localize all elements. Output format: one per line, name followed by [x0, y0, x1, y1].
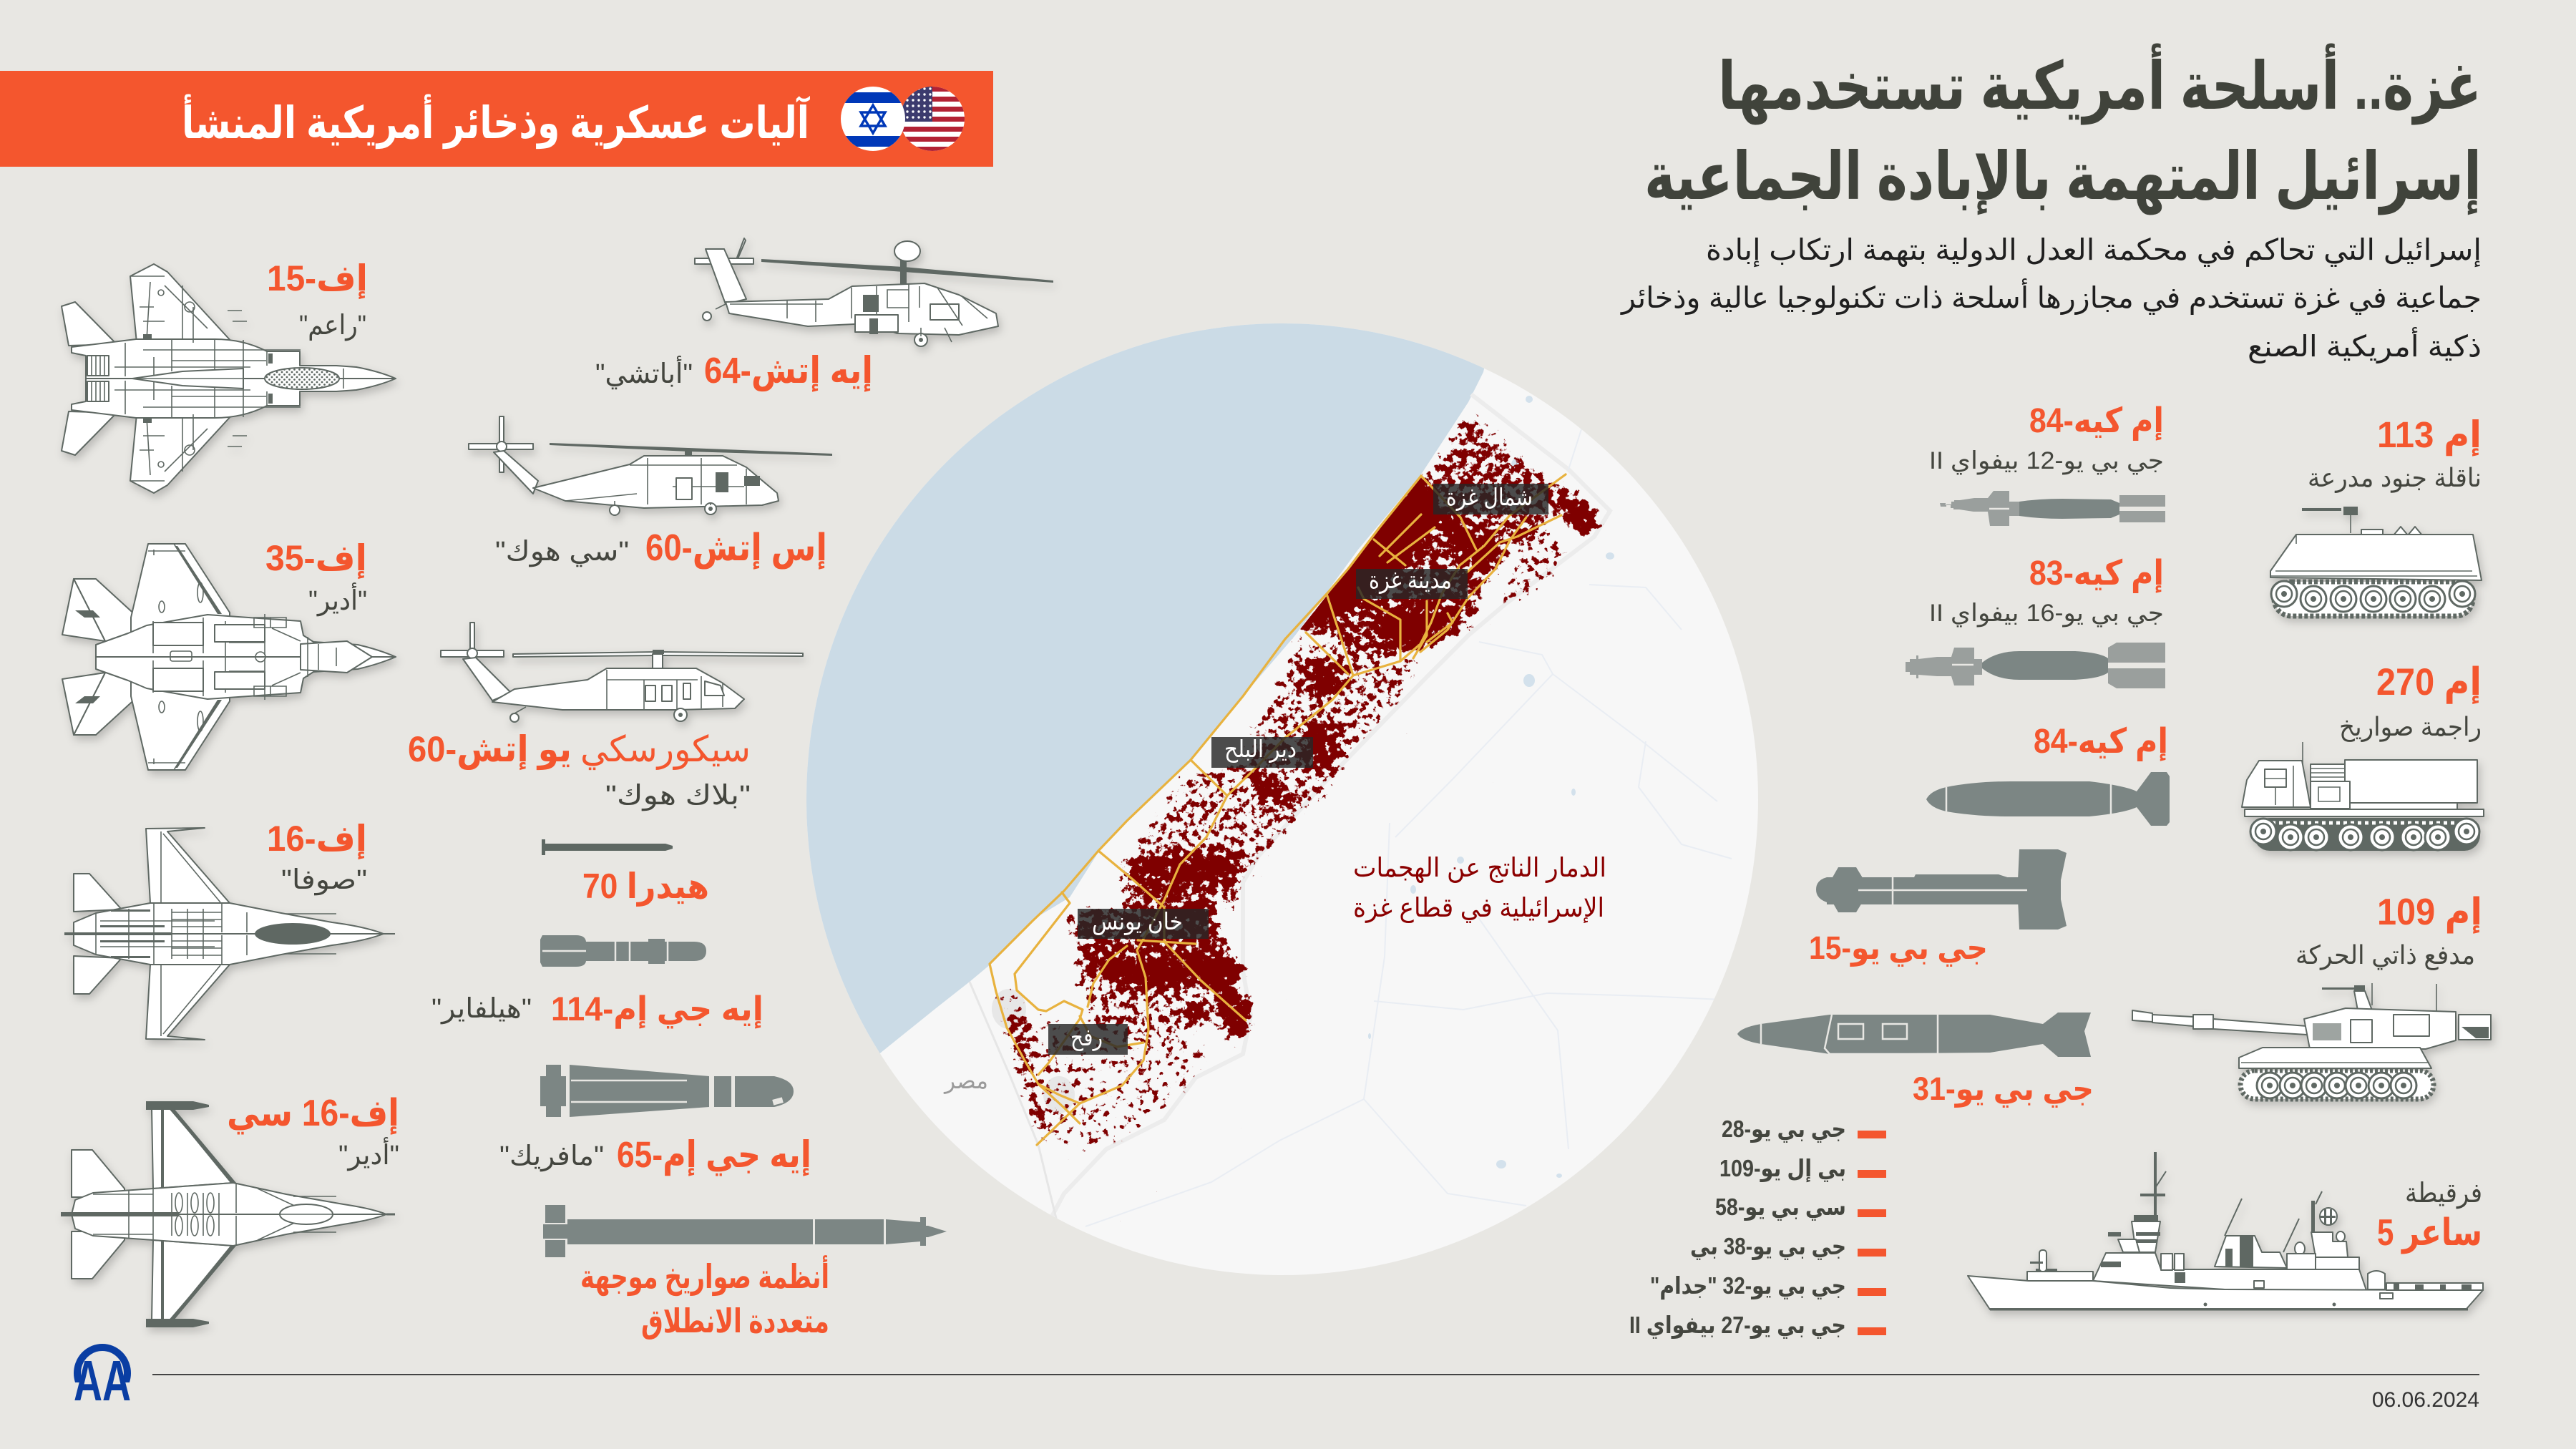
label: Rafah [1048, 1024, 1128, 1055]
label: إيه إتش-64 [704, 350, 873, 392]
panel: MK-83 with GBU-16 [1906, 555, 2165, 688]
map caption: الدمار الناتج عن الهجمات [1353, 853, 1606, 883]
intro text: إسرائيل التي تحاكم في محكمة العدل الدولية بتهمة ارتكاب إبادة [1706, 233, 2482, 268]
destruction density [995, 406, 1601, 1159]
icon: GBU-16 bomb [1906, 643, 2165, 688]
nickname: "هيلفاير" [431, 994, 532, 1025]
icon: corvette [1968, 1152, 2483, 1311]
icon: F-15 jet [62, 264, 396, 493]
item: GBU-38B: جي بي يو-38 بي [1690, 1233, 1846, 1261]
banner [0, 71, 993, 167]
panel: AGM-114 Hellfire [431, 935, 763, 1029]
description: جي بي يو-12 بيفواي II [1929, 447, 2164, 475]
label: Egypt: مصر [943, 1068, 988, 1094]
date: 06.06.2024 [2372, 1388, 2479, 1412]
icon: M113 carrier [2270, 507, 2482, 616]
icon: guided rocket [543, 1205, 947, 1257]
panel: F-16C [61, 1093, 399, 1327]
logo: AA: AA [74, 1349, 131, 1413]
icon: F-16 jet [64, 828, 395, 1040]
panel: MK-84 bomb [1926, 723, 2170, 826]
panel: SH-60 Seahawk [469, 416, 832, 570]
icon: Apache helicopter [695, 238, 1053, 346]
icon: US flag [903, 87, 965, 151]
nickname: "سي هوك" [495, 537, 629, 567]
label: إس إتش-60 [645, 527, 827, 570]
label: إف-15 [267, 258, 368, 300]
map [806, 323, 1758, 1275]
panel: M270 [2242, 661, 2484, 851]
panel: GBU-15 [1809, 849, 2067, 967]
panel: M109 [2132, 892, 2491, 1099]
label: إم 109 [2377, 892, 2482, 934]
label: إف-16 [267, 819, 367, 860]
title [1644, 43, 2482, 215]
label: إم 270 [2376, 661, 2482, 704]
label: إف-35 [265, 538, 367, 580]
panel: MK-84 with GBU-12 [1929, 402, 2165, 526]
intro text: ذكية أمريكية الصنع [2248, 327, 2482, 364]
panel: AGM-65 Maverick [499, 1065, 811, 1176]
label: إم كيه-84 [2034, 723, 2168, 761]
label: Gaza City: مدينة غزة [1369, 567, 1452, 594]
panel: Sa'ar 5 corvette [1968, 1152, 2483, 1311]
label: Khan Younis [1078, 908, 1209, 939]
built-up Rafah [992, 989, 1026, 1029]
label: Rafah: رفح [1070, 1024, 1103, 1051]
nickname: "صوفا" [281, 865, 367, 896]
description: فرقيطة [2405, 1179, 2482, 1209]
panel: GBU-31 [1737, 1013, 2094, 1108]
label: Deir al-Balah: دير البلح [1224, 736, 1297, 763]
label: ساعر 5 [2377, 1212, 2482, 1254]
description: ناقلة جنود مدرعة [2308, 463, 2482, 493]
panel: M113 [2270, 414, 2482, 616]
item: GBU-32 JDAM: جي بي يو-32 "جدام" [1650, 1272, 1846, 1300]
label: إيه جي إم-65 [617, 1134, 811, 1176]
panel: guided multiple launch rocket systems [543, 1205, 947, 1340]
icon: Hydra rocket [542, 839, 673, 855]
label: إف-16 سي [227, 1093, 399, 1135]
panel: Hydra 70 [542, 839, 709, 907]
label: جي بي يو-31 [1913, 1070, 2094, 1108]
icon: F-35 jet [62, 544, 396, 770]
icon: Black Hawk helicopter [441, 623, 803, 722]
intro text: جماعية في غزة تستخدم في مجازرها أسلحة ذات تكنولوجيا عالية وذخائر [1620, 278, 2482, 316]
label: إم كيه-84 [2029, 402, 2164, 441]
label: Deir al-Balah [1211, 736, 1313, 768]
nickname: "أدير" [338, 1137, 399, 1171]
nickname: "مافريك" [499, 1141, 604, 1172]
icon: Maverick missile [540, 1065, 794, 1117]
icon: MK-84 bomb [1926, 772, 2170, 826]
item: BLU-109: بي إل يو-109 [1719, 1155, 1846, 1183]
label: إيه جي إم-114 [551, 990, 763, 1029]
logo: AA [74, 1347, 131, 1413]
label: جي بي يو-15 [1809, 930, 1988, 967]
map caption: الإسرائيلية في قطاع غزة [1353, 893, 1604, 923]
label: هيدرا 70 [582, 867, 709, 907]
icon: Israel flag [837, 87, 909, 151]
label [408, 729, 751, 771]
panel: UH-60 Black Hawk [408, 623, 803, 811]
icon: M109 howitzer [2132, 983, 2491, 1099]
label [580, 1255, 829, 1340]
nickname: "أدير" [308, 582, 367, 617]
icon: Seahawk helicopter [469, 416, 832, 515]
label: Khan Younis: خان يونس [1092, 908, 1183, 935]
map place labels [943, 484, 1548, 1094]
description: جي بي يو-16 بيفواي II [1929, 600, 2164, 628]
description: مدفع ذاتي الحركة [2296, 940, 2475, 970]
label: يو إتش-60 [408, 729, 572, 771]
item: GBU-28: جي بي يو-28 [1722, 1116, 1846, 1143]
label: إم كيه-83 [2029, 555, 2164, 593]
icon: GBU-12 bomb [1940, 491, 2165, 526]
icon: GBU-31 bomb [1737, 1013, 2091, 1057]
label: أنظمة صواريخ موجهة [580, 1255, 829, 1296]
roads [990, 474, 1566, 1145]
nickname: "بلاك هوك" [605, 781, 751, 811]
strip border [1052, 394, 1610, 1216]
footer rule [152, 1374, 2479, 1375]
panel: F-35 [62, 538, 396, 770]
panel: AH-64 Apache [595, 238, 1053, 392]
label: متعددة الانطلاق [641, 1302, 829, 1340]
water spots [1368, 396, 1614, 1178]
map caption [1353, 853, 1606, 923]
icon: F-16C jet [61, 1101, 395, 1327]
nickname: "أباتشي" [595, 356, 693, 389]
label: north Gaza: شمال غزة [1446, 484, 1533, 511]
sea [806, 323, 1484, 1053]
icon: Hellfire missile [540, 935, 706, 967]
panel: F-16 [64, 819, 395, 1040]
icon: M270 launcher [2242, 742, 2484, 851]
icon: GBU-15 bomb [1816, 849, 2067, 930]
label: إم 113 [2377, 414, 2482, 457]
nickname: "راعم" [299, 311, 366, 341]
banner heading: آليات عسكرية وذخائر أمريكية المنشأ [182, 94, 810, 149]
land [880, 369, 1758, 1275]
item: GBU-27 Paveway II: جي بي يو-27 بيفواي II [1629, 1312, 1846, 1340]
intro text [1620, 233, 2482, 364]
panel: F-15 [62, 258, 396, 493]
land roads [1085, 401, 1767, 1226]
description: راجمة صواريخ [2339, 712, 2482, 742]
label: سيكورسكي [580, 729, 751, 770]
list: other munitions [1629, 1116, 1886, 1340]
item: CBU-58: سي بي يو-58 [1715, 1194, 1846, 1221]
